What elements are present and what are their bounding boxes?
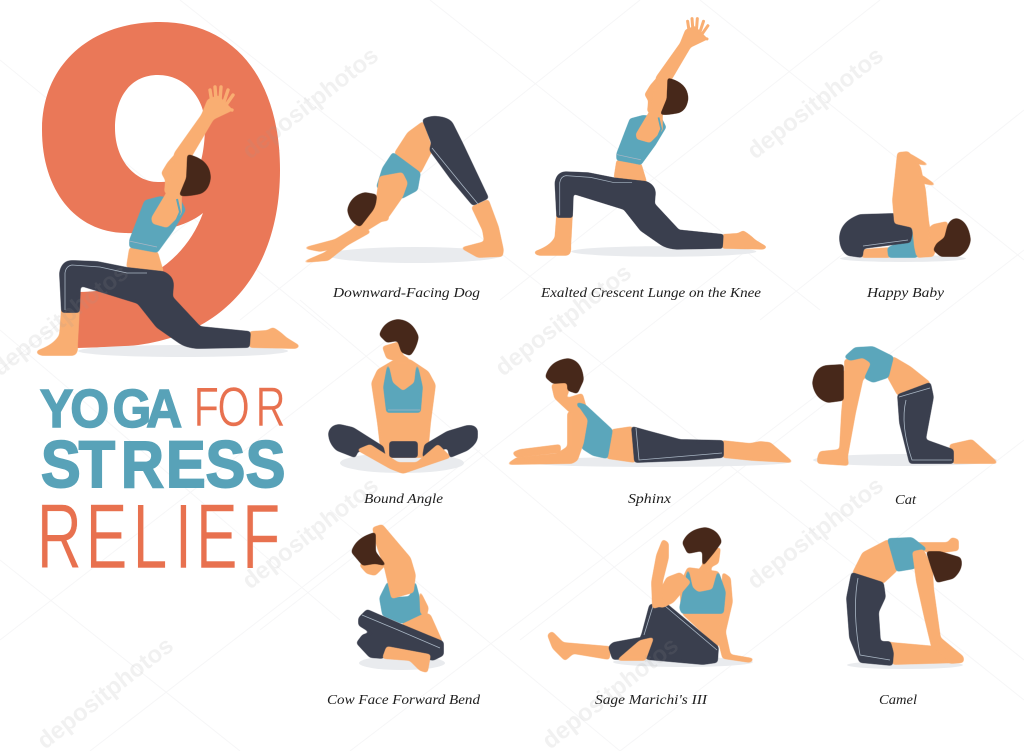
heading: Yoga for Stress Relief bbox=[37, 376, 286, 588]
figure: sage marichi's III bbox=[548, 528, 753, 667]
heading: Yoga for Stress Relief: STRESS bbox=[41, 428, 285, 502]
big number nine bbox=[42, 22, 280, 348]
label: Bound Angle: Bound Angle bbox=[364, 492, 443, 507]
watermarks: depositphotos bbox=[742, 42, 889, 165]
label: Exalted Crescent Lunge on the Knee: Exalted Crescent Lunge on the Knee bbox=[540, 286, 761, 301]
figure: exalted crescent lunge bbox=[535, 19, 766, 257]
label: Happy Baby: Happy Baby bbox=[866, 286, 945, 301]
watermarks: depositphotos bbox=[742, 472, 889, 595]
figure: camel bbox=[847, 538, 963, 669]
label: Sphinx: Sphinx bbox=[628, 492, 672, 507]
figure: bound angle bbox=[329, 320, 477, 473]
figure: sphinx bbox=[508, 359, 792, 467]
heading: Yoga for Stress Relief: YOGA bbox=[40, 378, 182, 438]
watermarks: depositphotos bbox=[490, 259, 637, 382]
label: Downward-Facing Dog: Downward-Facing Dog bbox=[332, 286, 480, 301]
figure: happy baby bbox=[840, 152, 970, 262]
figure: cow face forward bend bbox=[352, 525, 445, 672]
heading: Yoga for Stress Relief: FOR bbox=[194, 376, 286, 439]
label: Cat: Cat bbox=[895, 493, 917, 508]
label: Camel: Camel bbox=[879, 693, 917, 708]
figure: main lunge pose bbox=[37, 87, 299, 357]
heading: Yoga for Stress Relief: RELIEF bbox=[37, 485, 280, 588]
label: Cow Face Forward Bend: Cow Face Forward Bend bbox=[327, 693, 481, 708]
label: Sage Marichi's III: Sage Marichi's III bbox=[595, 693, 708, 708]
figure: cat bbox=[813, 347, 997, 466]
watermarks: depositphotos bbox=[237, 472, 384, 595]
watermarks: depositphotos bbox=[237, 42, 384, 165]
figure: downward-facing dog bbox=[304, 117, 503, 263]
